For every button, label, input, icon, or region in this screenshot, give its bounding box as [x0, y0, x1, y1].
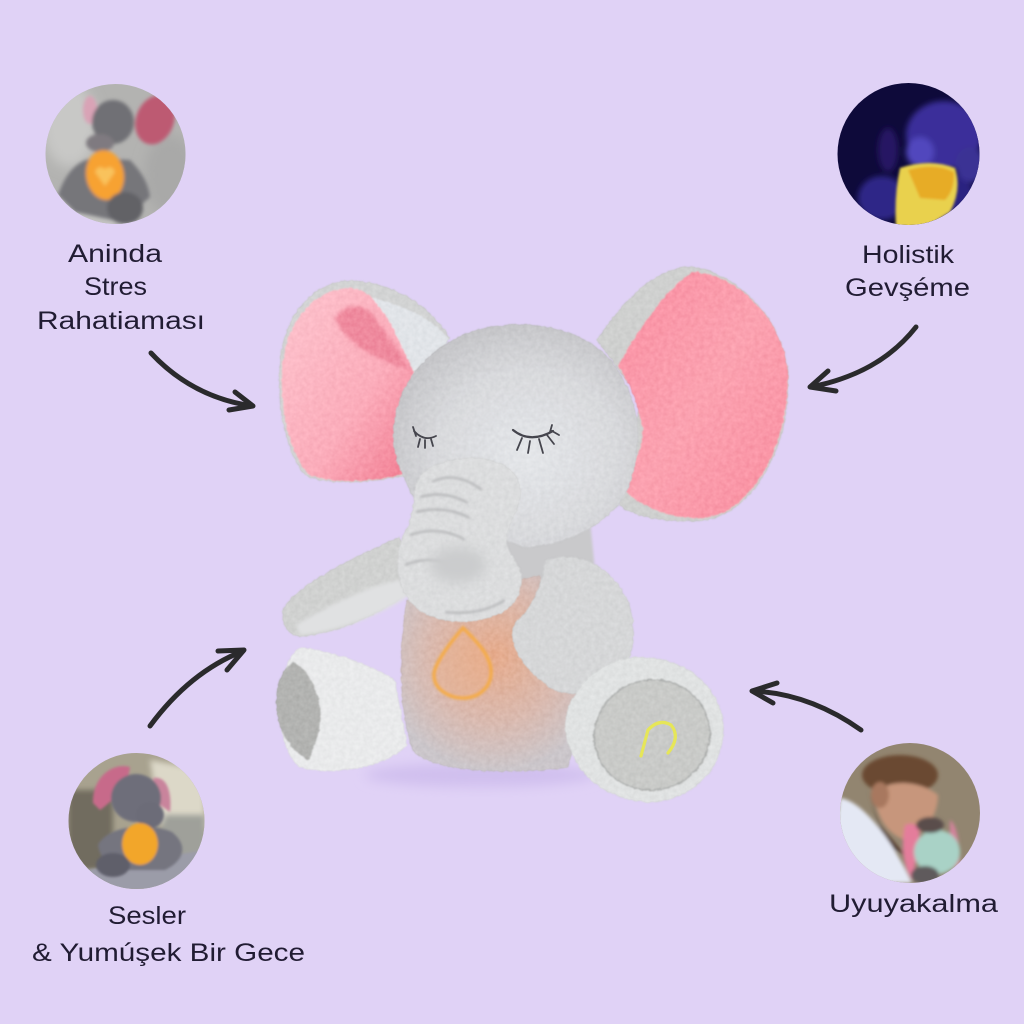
right arm — [512, 556, 634, 694]
label: Aninda Stres Rahatiaması: Stres — [84, 273, 147, 301]
orange heart-drop glow outline — [434, 628, 491, 698]
photo: elephant on blanket — [68, 753, 205, 890]
body with glow — [401, 575, 595, 772]
left closed eye — [413, 427, 436, 448]
right closed eye — [513, 425, 559, 453]
arrow: top left to elephant — [151, 353, 253, 410]
floor shadow — [365, 763, 595, 787]
photo: girl sleeping with plush — [835, 743, 980, 884]
label: Holistik Gevşéme — [845, 241, 970, 302]
left arm — [282, 536, 418, 637]
right foot — [565, 657, 724, 803]
label: Aninda Stres Rahatiaması: Aninda — [68, 240, 162, 268]
label: Holistik Gevşéme: Holistik — [862, 241, 955, 269]
left foot — [276, 647, 408, 771]
arrow: bottom left to elephant — [150, 650, 244, 726]
label: Aninda Stres Rahatiaması: Rahatiaması — [37, 307, 205, 335]
arrow: bottom right to elephant — [752, 683, 861, 730]
label: Sesler & Yumúşek Bir Gece: & Yumúşek Bir Gece — [32, 939, 305, 967]
label: Uyuyakalma: Uyuyakalma — [829, 890, 998, 918]
label: Sesler & Yumúşek Bir Gece: Sesler — [108, 902, 186, 930]
illustration: plush elephant — [276, 266, 789, 803]
photo: dark night glow — [838, 83, 980, 225]
eyes — [413, 425, 559, 453]
photo: elephant with glowing heart — [46, 84, 186, 224]
torso behind the head and arms — [410, 520, 600, 640]
label: Sesler & Yumúşek Bir Gece — [32, 902, 305, 967]
left ear — [279, 280, 450, 483]
trunk — [397, 457, 522, 622]
head — [393, 324, 638, 548]
light underside of left arm — [296, 580, 410, 635]
music note icon — [641, 722, 675, 756]
label: Holistik Gevşéme: Gevşéme — [845, 274, 970, 302]
right ear — [596, 266, 789, 522]
label: Aninda Stres Rahatiaması — [37, 240, 205, 335]
arrow: top right to elephant — [810, 327, 916, 391]
